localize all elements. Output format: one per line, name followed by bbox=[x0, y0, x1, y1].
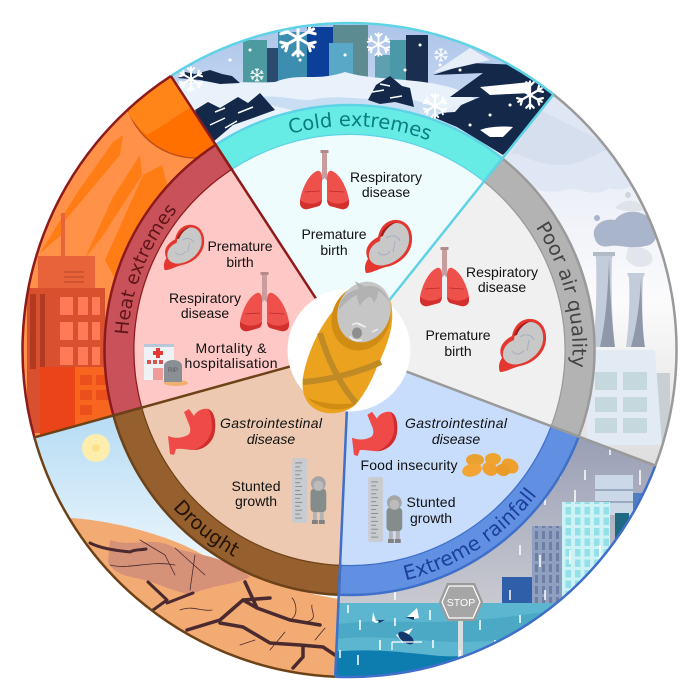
icon: hospital and gravestone bbox=[144, 344, 188, 386]
scene: flooded city bbox=[335, 438, 654, 677]
icon: womb bbox=[499, 319, 546, 372]
icon: stunted growth bbox=[292, 458, 326, 524]
panel: heat extremes bbox=[21, 75, 315, 438]
text: premature birth: Premature bbox=[302, 226, 367, 242]
label: Drought: Drought bbox=[174, 499, 239, 557]
centre circle with baby bbox=[288, 274, 410, 413]
icon: lungs bbox=[300, 150, 349, 209]
icon: stomach bbox=[352, 412, 397, 456]
wedge: extreme rainfall bbox=[340, 350, 551, 565]
icon: womb bbox=[164, 225, 204, 270]
text: premature birth: Premature bbox=[426, 327, 491, 343]
text: gastrointestinal disease: Gastrointestinal bbox=[405, 415, 508, 431]
text: gastrointestinal disease: disease bbox=[432, 431, 480, 447]
ring: extreme rainfall bbox=[339, 426, 579, 595]
wedge: poor air quality bbox=[350, 182, 564, 426]
scene: cracked earth bbox=[36, 417, 338, 677]
scene: factory bbox=[504, 96, 675, 464]
label: Extreme rainfall: Extreme rainfall bbox=[404, 487, 536, 580]
text: premature birth: Premature bbox=[208, 238, 273, 254]
text: mortality and hospitalisation: Mortality & bbox=[196, 340, 267, 356]
text: gastrointestinal disease: Gastrointestinal bbox=[220, 415, 323, 431]
text: respiratory disease: Respiratory bbox=[169, 290, 241, 306]
label: Cold extremes: Cold extremes bbox=[289, 112, 431, 140]
icon: stomach bbox=[168, 409, 215, 455]
stop sign bbox=[439, 583, 483, 621]
ring: cold extremes bbox=[216, 105, 502, 182]
icon: womb bbox=[365, 220, 412, 273]
text: respiratory disease: Respiratory bbox=[350, 169, 422, 185]
label: Poor air quality: Poor air quality bbox=[536, 221, 588, 368]
panel: drought bbox=[33, 368, 346, 678]
text: mortality and hospitalisation: hospitalisation bbox=[184, 355, 278, 371]
text: respiratory disease: disease bbox=[478, 279, 526, 295]
text: respiratory disease: disease bbox=[181, 305, 229, 321]
text: premature birth: birth bbox=[444, 343, 472, 359]
wedge: drought bbox=[142, 350, 350, 565]
panel: poor air quality bbox=[390, 94, 678, 466]
icon: food bbox=[461, 453, 521, 479]
text: premature birth: birth bbox=[226, 254, 254, 270]
icon: stunted growth bbox=[368, 477, 402, 543]
icon: hospital and gravestone: RIP bbox=[168, 368, 178, 374]
scene: hot city bbox=[24, 78, 214, 436]
snowflakes bbox=[179, 20, 544, 118]
ring: drought bbox=[113, 407, 340, 595]
panel: extreme rainfall bbox=[335, 372, 656, 678]
icon: lungs bbox=[240, 272, 289, 331]
icon: lungs bbox=[420, 247, 469, 306]
scene: snowy city bbox=[172, 24, 552, 156]
text: stunted growth: Stunted bbox=[232, 478, 280, 494]
sector boundaries bbox=[34, 76, 655, 677]
label: Heat extremes: Heat extremes bbox=[114, 204, 176, 334]
text: gastrointestinal disease: disease bbox=[247, 431, 295, 447]
wedge: cold extremes bbox=[232, 135, 484, 350]
ring: heat extremes bbox=[104, 145, 232, 416]
swaddle bbox=[303, 277, 400, 413]
text: food insecurity: Food insecurity bbox=[360, 457, 458, 473]
flood debris bbox=[372, 608, 422, 650]
trees bbox=[178, 70, 414, 142]
text: respiratory disease: Respiratory bbox=[466, 264, 538, 280]
text: respiratory disease: disease bbox=[362, 184, 410, 200]
text: stunted growth: Stunted bbox=[406, 494, 456, 510]
wedge: heat extremes bbox=[135, 170, 350, 407]
text: premature birth: birth bbox=[320, 242, 348, 258]
stop sign: STOP bbox=[447, 597, 475, 609]
text: stunted growth: growth bbox=[410, 510, 452, 526]
text: stunted growth: growth bbox=[235, 493, 277, 509]
head bbox=[328, 274, 400, 350]
ring: poor air quality bbox=[484, 158, 595, 437]
panel: cold extremes bbox=[170, 22, 554, 298]
